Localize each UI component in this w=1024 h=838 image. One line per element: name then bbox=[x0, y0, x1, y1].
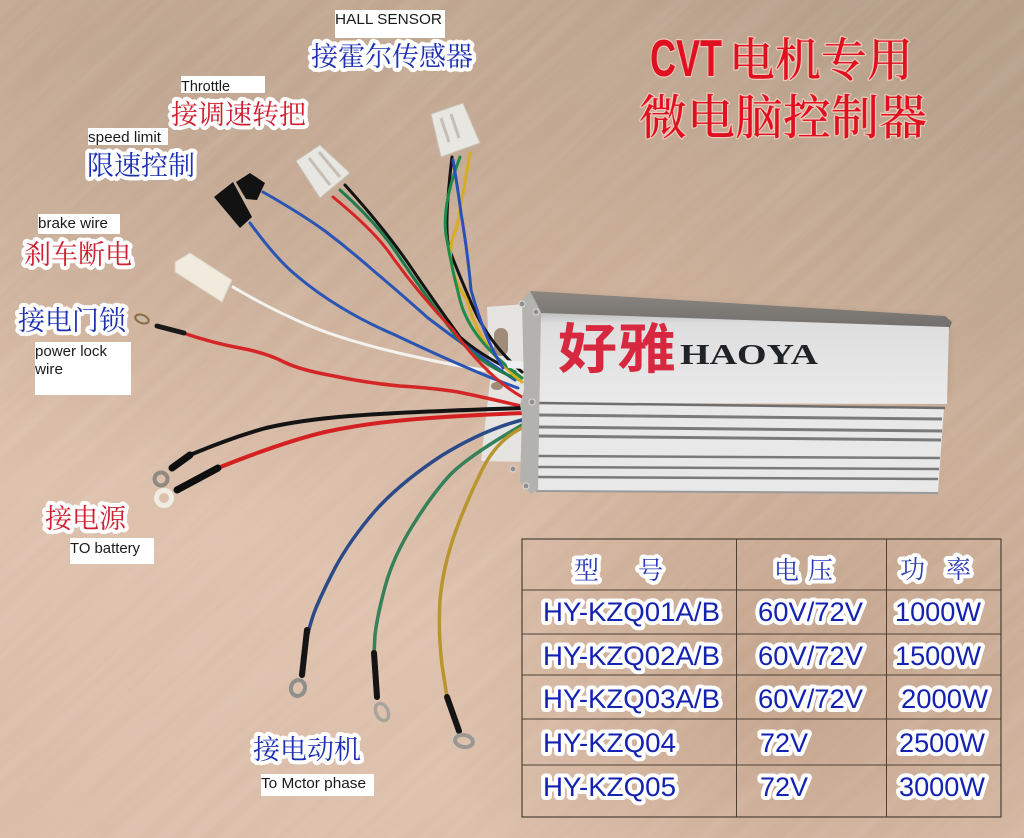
junction highlight bbox=[505, 360, 525, 369]
label: brake wire bbox=[24, 214, 132, 270]
row: HY-KZQ05: 72V bbox=[760, 772, 808, 802]
wire: brake white bbox=[233, 287, 515, 375]
wire: speed limit blue 1 bbox=[263, 192, 515, 380]
title: 微电脑控制器 bbox=[639, 92, 927, 145]
table header: 电 bbox=[774, 557, 799, 585]
label: speed limit: 限速控制 bbox=[87, 151, 195, 181]
label: to motor phase: 接电动机 bbox=[253, 735, 361, 765]
wire: hall blue bbox=[453, 160, 503, 368]
controller box bbox=[481, 291, 952, 493]
mounting bracket bbox=[481, 304, 526, 462]
wires bbox=[183, 153, 541, 697]
wire: motor green bbox=[374, 425, 522, 660]
wire: hall green bbox=[445, 157, 522, 378]
lower fins bbox=[536, 402, 945, 493]
row: HY-KZQ01A/B: 60V/72V bbox=[758, 597, 863, 627]
label: to motor phase: To Mctor phase bbox=[261, 775, 366, 792]
logo: 好雅 bbox=[558, 305, 676, 384]
wire: throttle black bbox=[345, 185, 515, 372]
spec table bbox=[522, 539, 1001, 817]
connector: throttle bbox=[296, 145, 350, 198]
wire: power lock red bbox=[183, 333, 525, 407]
row: HY-KZQ01A/B: HY-KZQ01A/B bbox=[543, 597, 720, 627]
label: power lock wire: 接电门锁 bbox=[18, 306, 127, 336]
wire: battery black bbox=[190, 408, 525, 455]
row: HY-KZQ03A/B: 60V/72V bbox=[758, 684, 863, 714]
table header: 号 bbox=[638, 557, 663, 585]
label: power lock wire: wire bbox=[34, 361, 63, 378]
row: HY-KZQ02A/B: HY-KZQ02A/B bbox=[543, 641, 720, 671]
lettered face bbox=[539, 313, 949, 404]
row: HY-KZQ02A/B bbox=[543, 641, 982, 671]
connector: hall bbox=[431, 103, 480, 157]
shadow bbox=[530, 296, 945, 395]
wire: hall yellow bbox=[450, 153, 522, 382]
table header: 压 bbox=[808, 558, 833, 585]
row: HY-KZQ04: 2500W bbox=[899, 728, 986, 758]
title: CVT bbox=[650, 30, 722, 88]
connector: brake bbox=[175, 253, 232, 302]
label: speed limit: speed limit bbox=[88, 129, 162, 146]
label: speed limit bbox=[87, 128, 195, 181]
row: HY-KZQ05: 3000W bbox=[899, 772, 986, 802]
wire: motor yellow bbox=[439, 428, 522, 697]
terminal: battery bbox=[154, 455, 218, 506]
wire: throttle red bbox=[333, 197, 522, 397]
row: HY-KZQ02A/B: 1500W bbox=[895, 641, 982, 671]
terminal: power lock bbox=[134, 313, 184, 333]
logo: HAOYA bbox=[680, 340, 819, 371]
controller end plate bbox=[520, 291, 541, 494]
wire: motor blue bbox=[306, 420, 522, 645]
label: brake wire: brake wire bbox=[38, 215, 108, 232]
table header: 功 bbox=[900, 556, 925, 584]
logo bbox=[558, 305, 819, 384]
table header: 率 bbox=[946, 556, 971, 584]
row: HY-KZQ03A/B: HY-KZQ03A/B bbox=[543, 684, 720, 714]
label: to motor phase bbox=[253, 735, 374, 796]
wire: throttle green bbox=[340, 190, 520, 380]
label: hall sensor: 接霍尔传感器 bbox=[311, 42, 473, 72]
label: to battery bbox=[45, 504, 154, 564]
label: power lock wire: power lock bbox=[35, 343, 107, 360]
row: HY-KZQ03A/B: 2000W bbox=[901, 684, 989, 714]
terminals: motor bbox=[289, 630, 474, 748]
label: brake wire: 刹车断电 bbox=[24, 240, 132, 270]
label: to battery: TO battery bbox=[70, 540, 140, 557]
controller screws bbox=[510, 301, 539, 489]
row: HY-KZQ04 bbox=[543, 728, 986, 758]
label: throttle: Throttle bbox=[181, 78, 230, 95]
connector: speed limit bbox=[214, 173, 265, 228]
wire: battery red bbox=[218, 413, 525, 468]
row: HY-KZQ05: HY-KZQ05 bbox=[543, 772, 676, 802]
label: to battery: 接电源 bbox=[45, 504, 127, 534]
table header: 型 bbox=[574, 557, 599, 585]
wire: hall black bbox=[447, 157, 522, 372]
row: HY-KZQ01A/B bbox=[543, 597, 982, 627]
wire: speed limit blue 2 bbox=[250, 223, 518, 388]
row: HY-KZQ03A/B bbox=[543, 684, 989, 714]
label: hall sensor bbox=[311, 10, 473, 72]
table header bbox=[574, 556, 971, 585]
row: HY-KZQ04: 72V bbox=[760, 728, 808, 758]
label: power lock wire bbox=[18, 306, 131, 395]
title bbox=[639, 30, 927, 145]
label: hall sensor: HALL SENSOR bbox=[335, 11, 442, 28]
row: HY-KZQ02A/B: 60V/72V bbox=[758, 641, 863, 671]
title: 电机专用 bbox=[729, 35, 913, 86]
top fins bbox=[526, 291, 952, 332]
row: HY-KZQ01A/B: 1000W bbox=[895, 597, 982, 627]
row: HY-KZQ04: HY-KZQ04 bbox=[543, 728, 676, 758]
row: HY-KZQ05 bbox=[543, 772, 986, 802]
table grid bbox=[522, 539, 1001, 817]
label: throttle: 接调速转把 bbox=[171, 100, 306, 130]
label: throttle bbox=[171, 76, 306, 130]
